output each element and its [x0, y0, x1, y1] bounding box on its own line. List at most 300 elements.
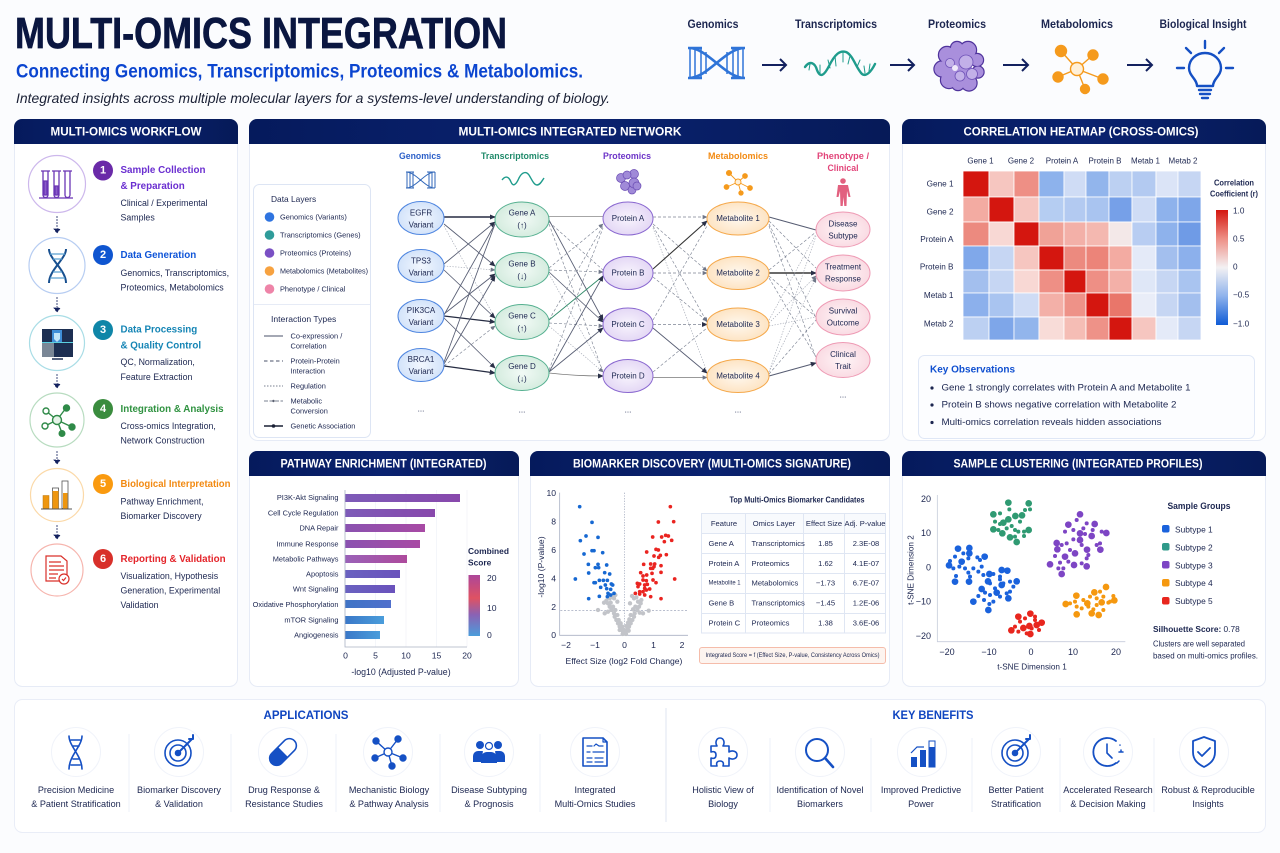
bar chart: pathway enrichment: 10 — [401, 650, 411, 660]
column: transcriptomics: (↓) — [517, 272, 527, 281]
icon: DNA helix — [688, 48, 745, 78]
column: genomics: PIK3CA — [407, 306, 436, 315]
heatmap colorbar legend: 0 — [1233, 262, 1238, 272]
t-SNE scatter plot: −20 — [916, 631, 931, 641]
application: disease subtyping: Disease Subtyping — [451, 785, 527, 795]
panel: biomarker discovery — [530, 451, 890, 686]
sample groups legend: Subtype 3 — [1175, 560, 1213, 570]
biomarker table: Gene B — [708, 598, 734, 608]
t-SNE scatter plot — [906, 494, 1125, 672]
column: proteomics: Proteomics — [603, 151, 651, 161]
network header: MULTI-OMICS INTEGRATED NETWORK — [458, 124, 682, 138]
column: genomics: Variant — [409, 220, 434, 230]
heatmap row labels — [920, 180, 954, 328]
column: genomics: Genomics — [399, 151, 441, 161]
heatmap colorbar legend: Coefficient (r) — [1210, 190, 1258, 198]
volcano plot — [536, 488, 688, 666]
step 4 circle icon: network — [30, 393, 84, 447]
heatmap row labels: Metab 2 — [924, 320, 954, 328]
step 6 text: Visualization, Hypothesis — [120, 571, 219, 581]
flow label: Transcriptomics: Transcriptomics — [795, 17, 877, 31]
step 6 circle icon: report document — [31, 544, 83, 596]
legend: data layers and interaction types: Genomics (Variants) — [280, 212, 347, 222]
biomarker table: −1.73 — [816, 578, 835, 588]
heatmap colorbar legend: −0.5 — [1233, 290, 1250, 300]
application: drug response: Drug Response & — [248, 785, 320, 795]
application: mechanistic biology — [349, 728, 430, 809]
arrow — [890, 59, 914, 71]
application: mechanistic biology: Mechanistic Biology — [349, 785, 430, 795]
t-SNE scatter plot: −10 — [916, 596, 931, 606]
step 2 circle icon: DNA — [29, 238, 85, 294]
legend: data layers and interaction types: Conversion — [290, 406, 328, 416]
benefit: reproducible insights: Insights — [1192, 799, 1224, 809]
heatmap column labels — [967, 156, 1198, 166]
bar chart: pathway enrichment: Immune Response — [276, 540, 338, 548]
legend: data layers and interaction types: Metabolomics (Metabolites) — [280, 266, 368, 276]
benefit: reproducible insights — [1161, 728, 1255, 809]
step 4 text: 4 — [100, 403, 107, 415]
icon: protein cluster — [934, 42, 984, 90]
arrow — [762, 59, 786, 71]
heatmap header: CORRELATION HEATMAP (CROSS-OMICS) — [964, 124, 1198, 138]
column: genomics: ... — [418, 404, 424, 414]
blue down-regulated points — [575, 507, 614, 599]
biomarker table: Proteomics — [752, 618, 790, 628]
heatmap header — [902, 119, 1266, 144]
column: proteomics: ... — [625, 406, 631, 414]
step 1 text: Sample Collection — [120, 165, 205, 176]
step 2 text: Data Generation — [120, 250, 196, 261]
step 3 text: Data Processing — [120, 324, 197, 336]
heatmap row labels: Metab 1 — [924, 291, 954, 300]
biomarker table: 4.1E-07 — [853, 559, 879, 568]
bar chart: pathway enrichment: 15 — [432, 650, 441, 660]
heatmap column labels: Protein B — [1089, 156, 1121, 166]
step 6 text: Validation — [120, 600, 159, 610]
column: phenotype / clinical: Clinical — [828, 163, 858, 173]
benefit: patient stratification: Better Patient — [988, 785, 1044, 795]
column: genomics: EGFR — [410, 208, 432, 218]
step 1 text — [93, 160, 208, 222]
red up-regulated points — [635, 507, 675, 599]
biomarker table: Adj. P-value — [845, 519, 885, 528]
workflow header — [14, 119, 238, 144]
bar chart: pathway enrichment: 5 — [373, 650, 378, 660]
combined score legend — [468, 546, 509, 640]
heatmap colorbar legend: 1.0 — [1233, 206, 1245, 216]
column: transcriptomics: Gene C — [508, 312, 536, 320]
biomarker table: Transcriptomics — [752, 539, 805, 548]
step 5 text — [93, 474, 231, 521]
column: phenotype / clinical: Response — [825, 274, 862, 284]
step 1 text: Clinical / Experimental — [120, 198, 208, 208]
column: metabolomics: Metabolite 1 — [716, 214, 760, 223]
column: transcriptomics: Gene B — [508, 260, 536, 268]
heatmap row labels: Protein B — [920, 262, 954, 272]
benefit: novel biomarkers: Identification of Novel — [777, 785, 863, 795]
column: phenotype / clinical: ... — [840, 390, 846, 400]
t-SNE scatter plot: 10 — [1068, 647, 1078, 657]
arrow — [54, 216, 60, 233]
arrow — [54, 297, 60, 312]
biomarker table: Feature — [711, 519, 737, 528]
column: proteomics: Protein D — [611, 372, 645, 380]
heatmap row labels: Gene 1 — [927, 180, 954, 188]
application: biomarker discovery: & Validation — [155, 799, 203, 809]
legend: data layers and interaction types: Proteomics (Proteins) — [280, 248, 351, 258]
subtitle: Connecting Genomics, Transcriptomics, Proteomics & Metabolomics. — [16, 62, 583, 82]
step 3 circle icon: computer instrument — [30, 316, 84, 370]
pathway header: PATHWAY ENRICHMENT (INTEGRATED) — [280, 456, 486, 470]
step 2 text: 2 — [100, 249, 106, 261]
column: phenotype / clinical: Subtype — [828, 232, 858, 240]
heatmap colorbar legend: 0.5 — [1233, 234, 1245, 244]
step 1 text: Samples — [120, 212, 155, 222]
bar chart: pathway enrichment: Wnt Signaling — [293, 584, 338, 594]
step 6 text: Reporting & Validation — [120, 554, 226, 565]
icon: RNA strand — [805, 52, 875, 75]
legend: data layers and interaction types: Interaction Types — [271, 314, 336, 324]
workflow header: MULTI-OMICS WORKFLOW — [50, 124, 202, 138]
biomarker table: 1.85 — [818, 539, 833, 548]
step 6 text: 6 — [100, 553, 106, 565]
cluster: subtype 3 — [1050, 514, 1106, 574]
biomarker table: 1.38 — [818, 618, 833, 628]
benefit: reproducible insights: Robust & Reproducible — [1161, 785, 1255, 795]
heatmap column labels: Protein A — [1046, 156, 1079, 166]
key observations callout: Key Observations — [930, 364, 1015, 376]
column: metabolomics: ... — [735, 406, 741, 414]
volcano plot: −1 — [590, 640, 600, 650]
column: proteomics — [603, 151, 653, 414]
biomarker table: 1.62 — [818, 559, 833, 568]
combined score legend: 20 — [487, 573, 497, 583]
sample groups legend: Subtype 2 — [1175, 542, 1213, 552]
clustering header — [902, 451, 1266, 476]
step 3 text: Feature Extraction — [120, 372, 192, 382]
bar chart: pathway enrichment: Metabolic Pathways — [273, 554, 339, 564]
column: transcriptomics: Gene D — [508, 362, 536, 371]
cluster: subtype 2 — [993, 503, 1030, 542]
t-SNE scatter plot: t-SNE Dimension 2 — [906, 535, 916, 605]
step 1 circle icon: test tubes — [28, 156, 86, 212]
bar chart: pathway enrichment: Apoptosis — [306, 570, 339, 578]
arrow — [1127, 59, 1152, 71]
volcano plot: 4 — [551, 574, 556, 584]
t-SNE scatter plot: 0 — [1028, 647, 1034, 657]
biomarker table: 3.6E-06 — [853, 618, 879, 628]
volcano plot: 8 — [551, 516, 556, 526]
biomarker table: 6.7E-07 — [853, 578, 879, 588]
t-SNE scatter plot: t-SNE Dimension 1 — [997, 662, 1067, 672]
benefit: holistic view: Holistic View of — [692, 785, 754, 795]
integrated score formula callout: Integrated Score = f (Effect Size, P-value, Consistency Across Omics) — [706, 652, 880, 659]
key benefits heading: KEY BENEFITS — [892, 708, 974, 722]
bar chart: pathway enrichment: DNA Repair — [299, 524, 339, 532]
cluster: subtype 4 — [1066, 587, 1114, 615]
legend: data layers and interaction types: Genetic Association — [290, 422, 355, 430]
flow label: Proteomics: Proteomics — [928, 17, 986, 31]
arrow — [54, 525, 60, 539]
application: biomarker discovery — [137, 728, 221, 809]
arrow — [54, 451, 60, 464]
legend: data layers and interaction types: Protein-Protein — [290, 356, 340, 366]
combined score legend: 0 — [487, 630, 492, 640]
silhouette score note: Silhouette Score: 0.78 — [1153, 624, 1240, 634]
step 2 text: Proteomics, Metabolomics — [120, 282, 224, 292]
column: transcriptomics: (↑) — [517, 324, 527, 333]
legend: data layers and interaction types: Phenotype / Clinical — [280, 284, 346, 294]
column: transcriptomics: ... — [519, 406, 525, 414]
key observations callout — [918, 356, 1254, 438]
arrow — [54, 374, 60, 388]
column: transcriptomics: Transcriptomics — [481, 151, 549, 161]
t-SNE scatter plot: −20 — [939, 647, 955, 657]
key observations callout: Multi-omics correlation reveals hidden associations — [942, 417, 1162, 428]
legend: data layers and interaction types: Regulation — [290, 382, 326, 390]
volcano plot: 2 — [551, 602, 556, 612]
benefit: predictive power: Power — [908, 799, 934, 809]
step 6 text: Generation, Experimental — [120, 586, 220, 596]
benefit: patient stratification — [988, 728, 1044, 809]
biomarker table — [701, 496, 886, 633]
column: metabolomics — [707, 151, 769, 414]
biomarker table: Metabolomics — [752, 578, 799, 588]
legend: data layers and interaction types — [254, 184, 370, 438]
integrated score formula callout — [700, 648, 886, 664]
column: metabolomics: Metabolomics — [708, 151, 768, 161]
arrow — [1003, 59, 1028, 71]
sample groups legend: Subtype 1 — [1175, 524, 1213, 534]
silhouette score note — [1153, 624, 1258, 660]
omics flow strip — [688, 17, 1246, 98]
sample groups legend — [1162, 501, 1230, 606]
column: transcriptomics: Gene A — [509, 208, 536, 218]
step 1 text: & Preparation — [120, 181, 185, 192]
applications heading: APPLICATIONS — [264, 708, 348, 722]
cluster: subtype 5 — [1011, 614, 1042, 634]
benefit: holistic view: Biology — [708, 799, 738, 809]
t-SNE scatter plot: 0 — [926, 562, 931, 572]
panel: pathway enrichment — [249, 451, 519, 686]
step 3 text — [93, 320, 201, 382]
step 4 text: Cross-omics Integration, — [120, 421, 216, 431]
column: proteomics: Protein B — [612, 268, 644, 278]
step 3 text: QC, Normalization, — [120, 357, 195, 367]
silhouette score note: based on multi-omics profiles. — [1153, 652, 1258, 660]
t-SNE scatter plot: 20 — [921, 494, 931, 504]
bar chart: pathway enrichment: Oxidative Phosphorylation — [253, 600, 338, 609]
biomarker header — [530, 451, 890, 476]
step 2 text — [93, 245, 229, 292]
application: integrated studies — [555, 728, 636, 809]
legend: data layers and interaction types: Interaction — [290, 366, 325, 376]
bar chart: pathway enrichment: Cell Cycle Regulation — [268, 508, 338, 518]
bar chart: pathway enrichment: Angiogenesis — [294, 630, 339, 640]
combined score legend: Score — [468, 558, 492, 568]
step 5 text: 5 — [100, 478, 106, 490]
sample groups legend: Subtype 5 — [1175, 596, 1213, 606]
column: phenotype / clinical: Disease — [829, 220, 858, 228]
benefit: novel biomarkers — [777, 728, 863, 809]
volcano plot: 2 — [680, 640, 685, 650]
column: genomics: Variant — [409, 268, 434, 278]
panel: workflow — [14, 119, 238, 686]
step 6 text — [93, 549, 226, 610]
network header — [249, 119, 890, 144]
key observations callout: Gene 1 strongly correlates with Protein A and Metabolite 1 — [942, 382, 1190, 394]
bar chart: pathway enrichment: 0 — [343, 650, 348, 660]
legend: data layers and interaction types: Co-expression / — [290, 332, 343, 340]
flow label: Genomics: Genomics — [688, 17, 739, 31]
heatmap row labels: Protein A — [920, 235, 954, 244]
gray non-significant points — [598, 595, 649, 634]
column: phenotype / clinical — [816, 151, 870, 400]
sample groups legend: Sample Groups — [1168, 501, 1230, 511]
biomarker table: 1.2E-06 — [853, 598, 879, 608]
column: phenotype / clinical: Phenotype / — [817, 151, 869, 161]
volcano plot: 0 — [551, 630, 556, 640]
biomarker table: Metabolite 1 — [708, 580, 741, 586]
column: phenotype / clinical: Clinical — [830, 350, 856, 359]
tagline: Integrated insights across multiple molecular layers for a systems-level understanding of biology. — [16, 90, 610, 106]
key observations callout: Protein B shows negative correlation with Metabolite 2 — [942, 400, 1176, 410]
column: phenotype / clinical: Survival — [829, 306, 857, 316]
column: proteomics: Protein C — [611, 320, 645, 329]
heatmap colorbar legend: Correlation — [1214, 178, 1254, 188]
panel: sample clustering — [902, 451, 1266, 686]
column: transcriptomics — [481, 151, 549, 414]
step 3 text: 3 — [100, 324, 106, 336]
bar chart: pathway enrichment: -log10 (Adjusted P-value) — [351, 667, 451, 677]
application: mechanistic biology: & Pathway Analysis — [349, 799, 429, 809]
step 4 text: Integration & Analysis — [120, 404, 224, 415]
step 5 circle icon: bar chart — [30, 468, 84, 522]
benefit: accelerated research: & Decision Making — [1070, 799, 1146, 809]
column: genomics: BRCA1 — [408, 355, 435, 364]
title: MULTI-OMICS INTEGRATION — [15, 9, 507, 58]
cluster: subtype 1 — [949, 548, 1017, 610]
heatmap colorbar legend — [1210, 178, 1258, 328]
step 5 text: Biomarker Discovery — [120, 511, 202, 521]
combined score legend: Combined — [468, 546, 509, 556]
column: transcriptomics: (↓) — [517, 374, 527, 384]
volcano plot: −2 — [561, 640, 571, 650]
application: biomarker discovery: Biomarker Discovery — [137, 785, 221, 795]
biomarker header: BIOMARKER DISCOVERY (MULTI-OMICS SIGNATURE) — [573, 456, 851, 470]
heatmap colorbar legend: −1.0 — [1233, 320, 1250, 328]
panel: correlation heatmap — [902, 119, 1266, 440]
network edges — [444, 216, 816, 378]
step 3 text: & Quality Control — [120, 340, 201, 352]
volcano plot: 10 — [546, 488, 556, 498]
t-SNE scatter plot: 20 — [1111, 647, 1121, 657]
biomarker table: Top Multi-Omics Biomarker Candidates — [730, 496, 865, 504]
legend: data layers and interaction types: Transcriptomics (Genes) — [280, 230, 361, 240]
biomarker table: Proteomics — [752, 559, 790, 568]
legend: data layers and interaction types: Data Layers — [271, 194, 316, 204]
step 4 text: Network Construction — [120, 436, 205, 446]
heatmap column labels: Metab 2 — [1169, 156, 1198, 166]
application: precision medicine — [31, 728, 121, 809]
benefit: novel biomarkers: Biomarkers — [797, 799, 843, 809]
application: drug response — [245, 728, 323, 809]
benefit: predictive power: Improved Predictive — [881, 785, 961, 795]
combined score legend: 10 — [487, 603, 497, 613]
biomarker table: Omics Layer — [753, 519, 796, 528]
biomarker table: Effect Size — [806, 519, 842, 528]
application: drug response: Resistance Studies — [245, 799, 323, 809]
heatmap row labels: Gene 2 — [927, 208, 954, 216]
volcano plot: 1 — [651, 640, 656, 650]
step 4 text — [93, 399, 224, 446]
t-SNE scatter plot: −10 — [981, 647, 997, 657]
column: phenotype / clinical: Trait — [835, 362, 852, 371]
biomarker table: Gene A — [708, 539, 735, 548]
biomarker table: 2.3E-08 — [853, 539, 879, 548]
application: disease subtyping — [451, 728, 527, 809]
column: genomics: TPS3 — [411, 256, 432, 266]
benefit: accelerated research: Accelerated Research — [1063, 785, 1153, 795]
bar chart: pathway enrichment: mTOR Signaling — [284, 616, 338, 624]
application: integrated studies: Integrated — [575, 785, 615, 795]
column: metabolomics: Metabolite 2 — [716, 268, 760, 278]
icon: metabolite network — [1053, 46, 1108, 94]
column: metabolomics: Metabolite 4 — [716, 372, 760, 380]
benefit: accelerated research — [1063, 728, 1153, 809]
volcano plot: 0 — [622, 640, 627, 650]
volcano plot: Effect Size (log2 Fold Change) — [566, 656, 683, 666]
biomarker table: Protein A — [708, 559, 740, 568]
step 5 text: Pathway Enrichment, — [120, 496, 204, 506]
biomarker table: Transcriptomics — [752, 598, 805, 608]
bar chart: pathway enrichment — [253, 490, 472, 677]
t-SNE scatter plot: 10 — [921, 528, 931, 538]
step 2 text: Genomics, Transcriptomics, — [120, 268, 229, 278]
bar chart: pathway enrichment: 20 — [462, 650, 472, 660]
benefit: patient stratification: Stratification — [991, 799, 1041, 809]
biomarker table: Protein C — [708, 618, 741, 628]
column: genomics: Variant — [409, 318, 434, 327]
legend: data layers and interaction types: Metabolic — [290, 396, 322, 406]
column: proteomics: Protein A — [612, 214, 645, 223]
application: precision medicine: Precision Medicine — [38, 785, 114, 795]
bar chart: pathway enrichment: PI3K-Akt Signaling — [277, 493, 338, 502]
column: phenotype / clinical: Treatment — [825, 262, 862, 272]
icon: light bulb — [1177, 41, 1233, 98]
column: metabolomics: Metabolite 3 — [716, 320, 760, 329]
silhouette score note: Clusters are well separated — [1153, 640, 1245, 648]
benefit: predictive power — [881, 728, 961, 809]
volcano plot: -log10 (P-value) — [536, 536, 546, 598]
step 5 text: Biological Interpretation — [120, 479, 231, 490]
column: genomics — [398, 151, 444, 414]
heatmap grid — [963, 171, 1201, 340]
column: genomics: Variant — [409, 367, 434, 376]
heatmap column labels: Gene 1 — [967, 156, 994, 166]
column: transcriptomics: (↑) — [517, 221, 527, 230]
heatmap column labels: Gene 2 — [1008, 156, 1035, 166]
legend: data layers and interaction types: Correlation — [290, 342, 327, 350]
panel: integrated network — [249, 119, 890, 440]
flow label: Metabolomics: Metabolomics — [1041, 17, 1113, 31]
step 1 text: 1 — [100, 164, 106, 176]
flow label: Biological Insight: Biological Insight — [1160, 17, 1246, 31]
column: phenotype / clinical: Outcome — [827, 318, 860, 328]
sample groups legend: Subtype 4 — [1175, 578, 1213, 588]
panel: applications and key benefits — [14, 700, 1266, 832]
